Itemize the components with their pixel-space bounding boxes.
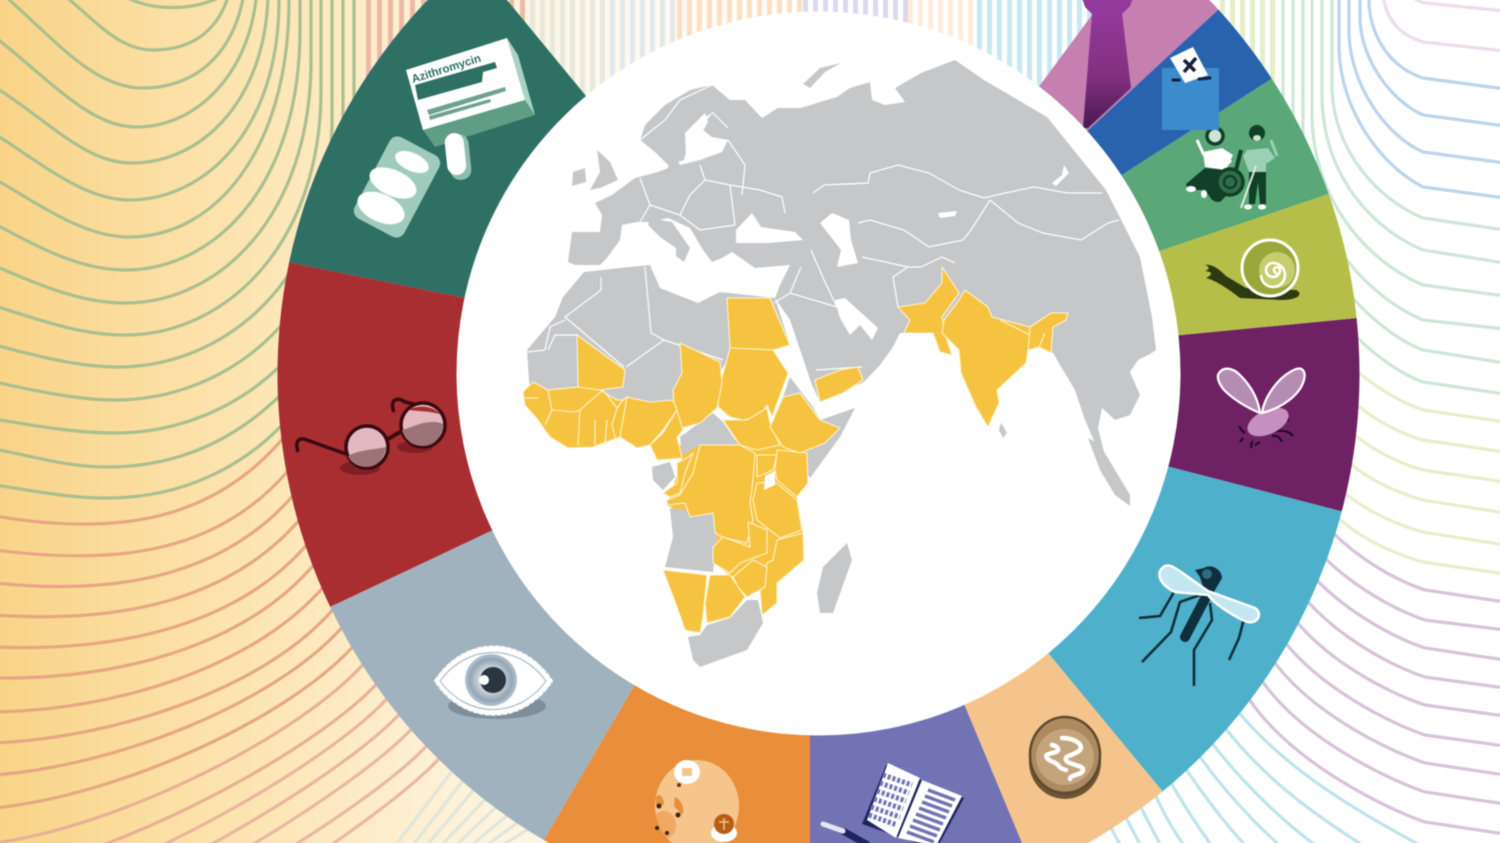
icon: azithromycin box and pills: Azithromycin [410, 53, 483, 86]
segment: sky blue [1048, 466, 1342, 792]
world map [523, 60, 1156, 667]
background: lower left contour lines [0, 436, 443, 843]
icon: fly [1218, 369, 1305, 448]
icon: glasses [297, 399, 445, 475]
segment: grey [330, 530, 635, 840]
central white circle [456, 12, 1180, 736]
segment: red [276, 262, 493, 608]
segment: pink [1038, 0, 1219, 132]
background: left contour lines [0, 0, 354, 498]
map: Rwanda gap [764, 471, 775, 490]
map: Africa yellow underlay [650, 427, 808, 615]
map: inland seas [685, 113, 1069, 340]
background: top vertical stripes [366, 0, 1280, 204]
background: right contour lines [1108, 0, 1500, 843]
icon: mosquito [1139, 565, 1259, 686]
map: internal borders [525, 320, 1045, 445]
background: bottom grey contour lines [395, 766, 549, 843]
segment: plum [1168, 317, 1360, 512]
segment: peach [964, 653, 1163, 843]
icon: people with disabilities [1186, 125, 1277, 210]
segmented ring [276, 0, 1360, 843]
icon: eye [435, 646, 552, 719]
segment: orange [544, 684, 811, 843]
icon: snail [1205, 240, 1299, 300]
icon: piggy bank [652, 760, 739, 843]
map: highlighted countries [523, 267, 1068, 633]
map: grey land [527, 60, 1156, 667]
segment: olive [1158, 194, 1358, 336]
segment: blue [1086, 9, 1272, 176]
segment: teal [288, 0, 586, 298]
icon: ballot box [1162, 47, 1219, 130]
icon: open book and pen [823, 763, 964, 843]
segment: indigo [809, 704, 1023, 843]
map: grey region borders [527, 85, 1119, 370]
segment: green [1121, 78, 1329, 252]
icon: azithromycin box and pills [351, 38, 535, 241]
icon: petri dish with worm [1029, 717, 1101, 799]
icon: raised fist [1081, 0, 1134, 128]
